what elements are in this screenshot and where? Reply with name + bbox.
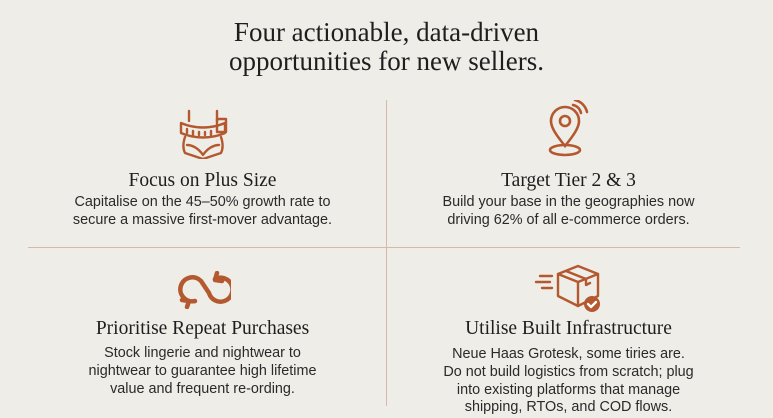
text bbox=[443, 346, 694, 415]
text bbox=[88, 345, 316, 397]
heading: Prioritise Repeat Purchases bbox=[96, 318, 309, 339]
title: opportunities for new sellers. bbox=[229, 46, 544, 76]
text: shipping, RTOs, and COD flows. bbox=[465, 399, 672, 415]
icon: waist tape bbox=[180, 110, 228, 159]
heading: Utilise Built Infrastructure bbox=[465, 318, 672, 339]
heading: Focus on Plus Size bbox=[129, 170, 276, 191]
icon: delivery box bbox=[534, 264, 600, 312]
text bbox=[73, 194, 332, 228]
text: nightwear to guarantee high lifetime bbox=[88, 363, 316, 379]
text: Stock lingerie and nightwear to bbox=[104, 345, 301, 361]
title bbox=[229, 17, 544, 76]
text: Neue Haas Grotesk, some tiries are. bbox=[452, 346, 685, 362]
panel: repeat purchases bbox=[88, 271, 316, 397]
text: value and frequent re-ording. bbox=[110, 381, 295, 397]
text: into existing platforms that manage bbox=[457, 382, 680, 398]
title: Four actionable, data-driven bbox=[234, 17, 539, 47]
panel: plus size bbox=[73, 110, 332, 228]
heading: Target Tier 2 & 3 bbox=[501, 170, 636, 191]
panel: tier 2 & 3 bbox=[442, 100, 694, 228]
icon: location pin bbox=[548, 100, 588, 156]
text: secure a massive first-mover advantage. bbox=[73, 212, 332, 228]
icon: repeat arrows bbox=[178, 271, 231, 309]
text: Capitalise on the 45–50% growth rate to bbox=[74, 194, 330, 210]
text: Do not build logistics from scratch; plug bbox=[443, 364, 694, 380]
panel: infrastructure bbox=[443, 264, 694, 415]
text bbox=[442, 194, 694, 228]
text: driving 62% of all e-commerce orders. bbox=[447, 212, 690, 228]
text: Build your base in the geographies now bbox=[442, 194, 694, 210]
